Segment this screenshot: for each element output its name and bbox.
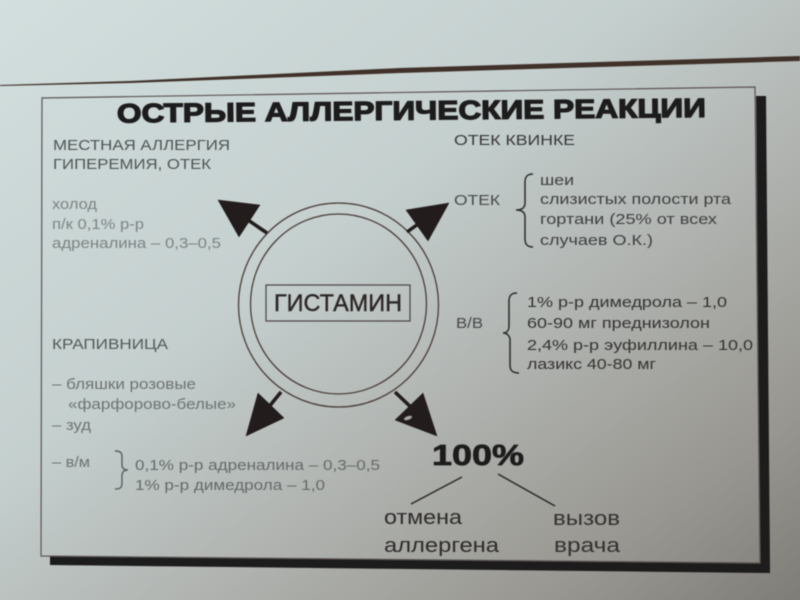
text block: urticaria treatment: 1% р-р димедрола – 1,0 — [135, 478, 325, 494]
text block: cancel allergen — [384, 507, 500, 557]
page edge line at top — [0, 56, 800, 86]
box: histamine: ГИСТАМИН — [274, 290, 402, 317]
text block: urticaria heading: КРАПИВНИЦА — [52, 336, 168, 353]
title: ОСТРЫЕ АЛЛЕРГИЧЕСКИЕ РЕАКЦИИ — [117, 93, 706, 128]
connector lines from 100% — [411, 474, 555, 506]
label: intravenous: В/В — [456, 315, 483, 332]
text block: local allergy heading — [53, 137, 230, 173]
brace: intravenous — [503, 293, 519, 373]
text block: urticaria symptoms: – зуд — [52, 418, 92, 434]
arrow: top left — [218, 200, 267, 237]
panel shadow — [50, 96, 770, 573]
brace: edema — [516, 174, 533, 247]
text block: edema locations: случаев О.К.) — [540, 232, 653, 249]
text block: local allergy heading: ГИПЕРЕМИЯ, ОТЕК — [53, 156, 211, 173]
heading: Quincke edema: ОТЕК КВИНКЕ — [454, 132, 575, 149]
text block: edema locations: гортани (25% от всех — [540, 211, 718, 228]
label: edema: ОТЕК — [454, 192, 500, 209]
panel: main frame — [41, 87, 760, 563]
arrow: bottom left — [246, 392, 284, 436]
text block: intravenous drugs — [527, 294, 753, 373]
figure: 100%: 100% — [432, 440, 524, 472]
text block: local allergy treatment: п/к 0,1% р-р — [52, 217, 144, 233]
arrow: top right — [406, 203, 449, 241]
text block: local allergy treatment: адреналина – 0,3–0,5 — [52, 236, 221, 252]
text block: edema locations: шеи — [540, 172, 574, 189]
text block: call doctor: врача — [554, 535, 621, 557]
text block: local allergy heading: МЕСТНАЯ АЛЛЕРГИЯ — [53, 137, 230, 154]
text block: intravenous drugs: лазикс 40-80 мг — [527, 356, 657, 373]
text block: urticaria symptoms: – бляшки розовые — [52, 377, 196, 393]
text block: intravenous drugs: 1% р-р димедрола – 1,0 — [527, 294, 727, 311]
text block: urticaria symptoms — [52, 377, 236, 471]
text block: call doctor — [553, 508, 621, 557]
text block: urticaria treatment — [135, 458, 380, 494]
text block: urticaria symptoms: «фарфорово-белые» — [68, 397, 236, 413]
text block: local allergy treatment: холод — [52, 197, 98, 213]
text block: intravenous drugs: 2,4% р-р эуфиллина – 10,0 — [527, 337, 753, 354]
text block: urticaria symptoms: – в/м — [52, 455, 90, 471]
text block: cancel allergen: аллергена — [384, 535, 500, 557]
brace: urticaria — [115, 451, 128, 489]
circle: double ring — [238, 203, 438, 407]
box: histamine — [266, 285, 410, 321]
text block: edema locations — [540, 172, 732, 249]
text block: urticaria treatment: 0,1% р-р адреналина – 0,3–0,5 — [135, 458, 380, 474]
text block: edema locations: слизистых полости рта — [540, 191, 732, 208]
arrow: bottom right — [395, 392, 437, 436]
text block: local allergy treatment — [52, 197, 221, 252]
text block: cancel allergen: отмена — [384, 507, 463, 529]
text block: intravenous drugs: 60-90 мг преднизолон — [527, 315, 710, 332]
text block: call doctor: вызов — [553, 508, 620, 530]
